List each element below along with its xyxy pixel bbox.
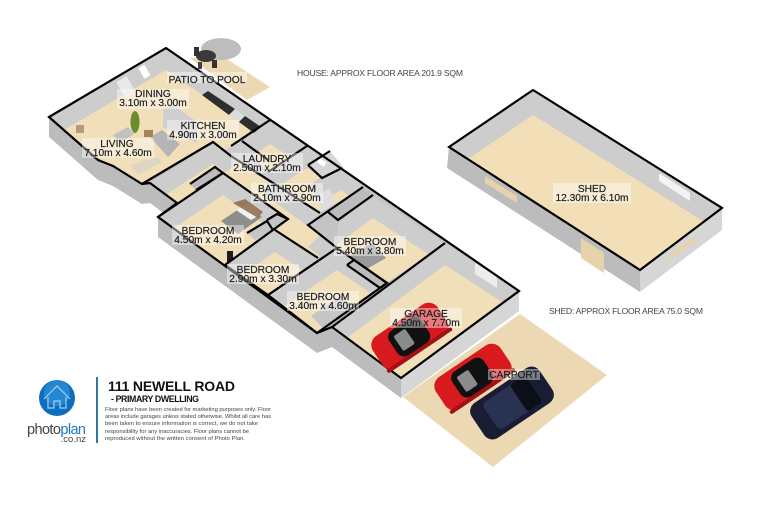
label: bedroom four [334, 236, 406, 257]
label: bedroom two [227, 264, 299, 285]
label: patio: PATIO TO POOL [169, 75, 246, 86]
label: bedroom three [287, 291, 359, 312]
label: garage: GARAGE [404, 309, 448, 320]
label: laundry: 2.50m x 2.10m [233, 163, 301, 174]
room: bedroom three [270, 252, 378, 332]
house exterior walls [49, 117, 519, 398]
label: carport: CARPORT [489, 370, 539, 381]
label: bedroom four: BEDROOM [344, 237, 396, 248]
subtitle: - PRIMARY DWELLING [111, 394, 199, 404]
rug [130, 157, 162, 175]
label: shed: 12.30m x 6.10m [555, 193, 629, 204]
label: kitchen [167, 120, 239, 141]
room: bathroom [266, 147, 362, 213]
car: red sports car in garage [367, 298, 453, 374]
room: bedroom two [229, 231, 316, 294]
room: toilet [308, 151, 344, 178]
kitchen counter [202, 91, 261, 133]
disclaimer text: areas include garages unless stated otherwise. Whilst all care has [105, 414, 271, 420]
icon: plant [130, 111, 140, 133]
logo: photoplan: .co.nz [61, 434, 86, 445]
title: 111 NEWELL ROAD [108, 378, 235, 394]
divider bar [96, 377, 98, 443]
label: garage: 4.50m x 7.70m [392, 318, 460, 329]
disclaimer text: Floor plans have been created for marketing purposes only. Floor [105, 407, 271, 413]
icon: bed one [221, 199, 263, 262]
label: dining [117, 89, 189, 109]
label: bedroom one [172, 225, 244, 246]
patio slab [190, 56, 270, 100]
logo: photoplan: photoplan [27, 422, 86, 438]
label: shed [553, 183, 631, 204]
label: living [82, 138, 154, 159]
icon: patio table and umbrella [194, 38, 241, 69]
label: shed: SHED [578, 184, 606, 195]
label: bedroom four: 5.40m x 3.80m [336, 246, 404, 257]
disclaimer text [105, 407, 271, 442]
icon: sofa [76, 125, 180, 157]
house base [49, 48, 519, 378]
label: bedroom one: 4.50m x 4.20m [174, 235, 242, 246]
house floor area note: HOUSE: APPROX FLOOR AREA 201.9 SQM [297, 68, 463, 78]
label: dining: 3.10m x 3.00m [119, 98, 187, 109]
wardrobes [190, 167, 387, 288]
disclaimer text: responsibility for any inaccuracies. Floor plans cannot be [105, 429, 249, 435]
carport slab [403, 314, 607, 467]
label: laundry [231, 153, 303, 174]
car: navy SUV [466, 363, 558, 443]
label: bedroom one: BEDROOM [182, 226, 234, 237]
label: bedroom two: 2.90m x 3.30m [229, 274, 297, 285]
label: kitchen: KITCHEN [181, 121, 225, 132]
room: laundry [244, 122, 305, 171]
room: living dining kitchen [52, 50, 268, 182]
room: bedroom one [160, 175, 276, 264]
disclaimer text: reproduced without the written consent of Photo Plan. [105, 436, 245, 442]
label: laundry: LAUNDRY [243, 154, 291, 165]
label: bedroom two: BEDROOM [237, 265, 289, 276]
shed floor area note: SHED: APPROX FLOOR AREA 75.0 SQM [549, 306, 703, 316]
room: garage [334, 244, 516, 376]
room: hallway [152, 142, 334, 258]
shed building [445, 88, 725, 295]
house wall outlines [49, 48, 519, 378]
label: bathroom: 2.10m x 2.90m [253, 193, 321, 204]
car: red sports car in carport [430, 339, 516, 415]
label: bedroom three: BEDROOM [297, 292, 349, 303]
label: bathroom: BATHROOM [258, 184, 316, 195]
label: living: 7.10m x 4.60m [84, 148, 152, 159]
room: bedroom four [338, 196, 444, 282]
label: kitchen: 4.90m x 3.00m [169, 130, 237, 141]
label: bedroom three: 3.40m x 4.60m [289, 301, 357, 312]
logo: photoplan [27, 380, 86, 445]
label: bathroom [251, 183, 323, 204]
label: dining: DINING [135, 89, 171, 100]
label: garage [390, 308, 462, 329]
label: living: LIVING [100, 139, 134, 150]
disclaimer text: been taken to ensure information is correct, we do not take [105, 421, 258, 427]
